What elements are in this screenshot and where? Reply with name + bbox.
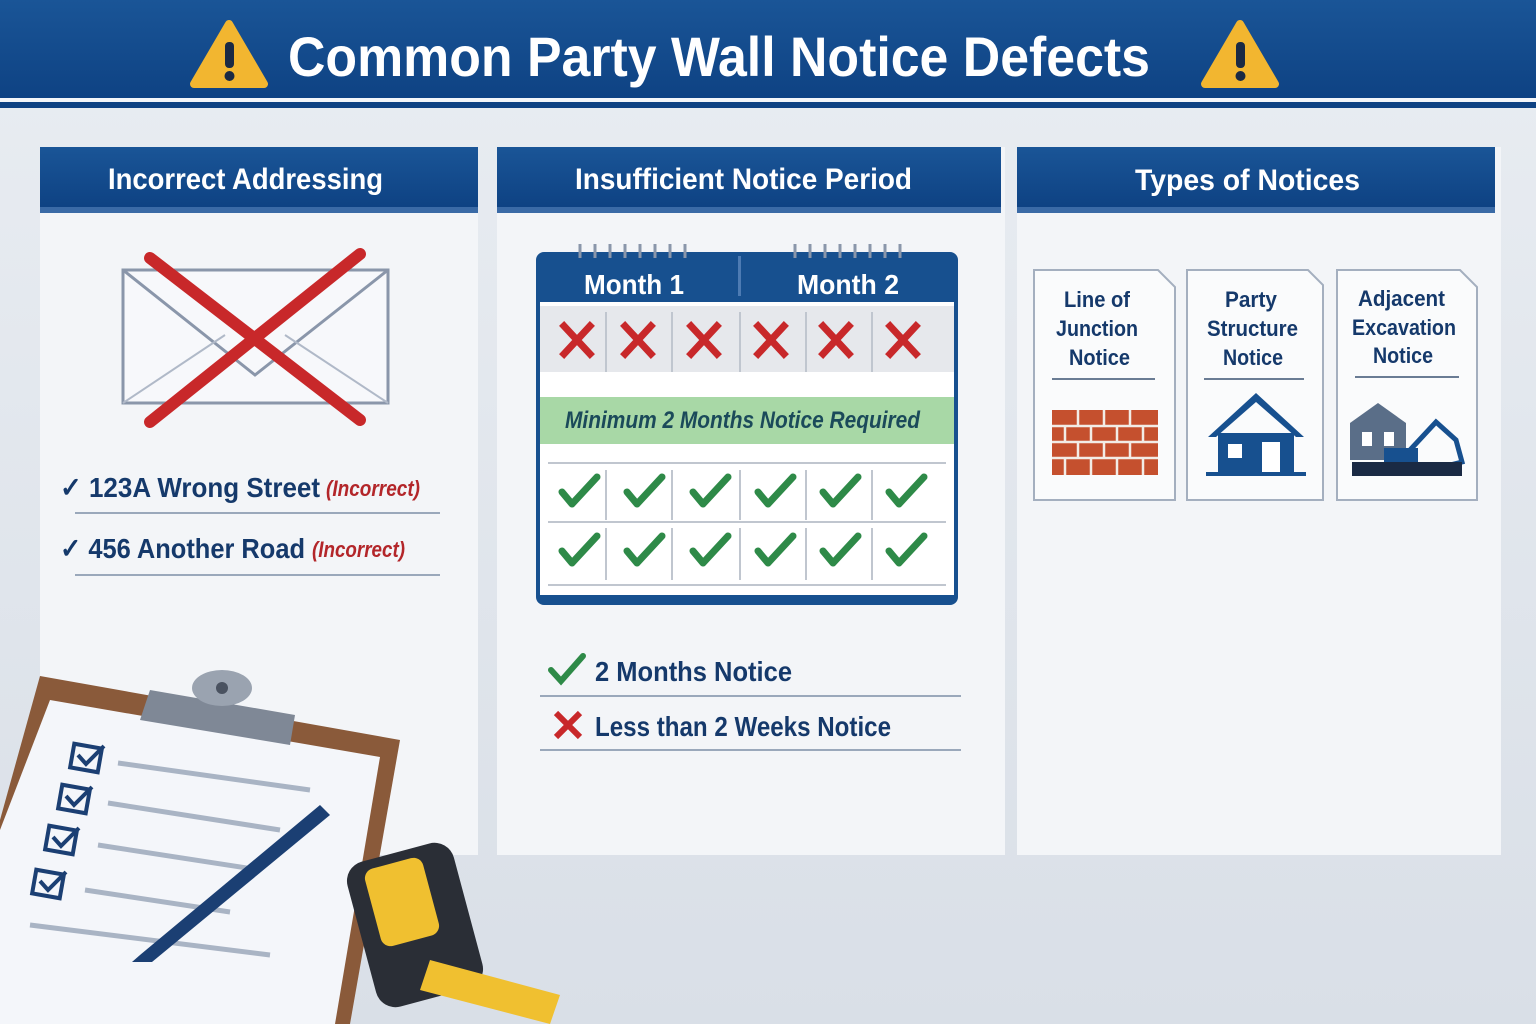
heading: insufficient notice period: Insufficient Notice Period — [575, 163, 912, 196]
card: party structure: Structure — [1207, 316, 1298, 341]
panel: insufficient notice period — [497, 147, 1005, 855]
calendar: Month 2 — [797, 269, 899, 300]
card: line of junction: Notice — [1069, 345, 1130, 370]
clipboard — [0, 670, 560, 1024]
card: line of junction: Line of — [1064, 287, 1131, 312]
address line 1 — [60, 472, 440, 514]
heading: types of notices: Types of Notices — [1135, 164, 1360, 197]
card: line of junction — [1034, 270, 1175, 500]
card: adjacent excavation: Excavation — [1352, 315, 1456, 340]
calendar: Minimum 2 Months Notice Required — [565, 407, 921, 434]
panel: types of notices — [1017, 147, 1501, 855]
address line 1: (Incorrect) — [326, 476, 420, 501]
legend: less than 2 weeks — [540, 711, 961, 751]
panel: incorrect addressing — [40, 147, 478, 855]
legend: 2 months notice — [540, 656, 961, 697]
card: adjacent excavation: Adjacent — [1358, 286, 1446, 311]
title: Common Party Wall Notice Defects — [288, 25, 1150, 88]
card: adjacent excavation: Notice — [1373, 343, 1433, 368]
header banner — [0, 0, 1536, 108]
card: party structure: Notice — [1223, 345, 1283, 370]
card: party structure — [1187, 270, 1323, 500]
icon: warning left — [194, 24, 264, 84]
calendar — [536, 244, 958, 605]
icon: crossed envelope — [123, 254, 388, 422]
legend: 2 months notice: 2 Months Notice — [595, 656, 792, 687]
card: line of junction: Junction — [1056, 316, 1138, 341]
card: party structure: Party — [1225, 287, 1278, 312]
address line 2: ✓ 456 Another Road — [60, 533, 305, 564]
card: adjacent excavation — [1337, 270, 1477, 500]
address line 2: (Incorrect) — [312, 537, 405, 562]
icon: warning right — [1205, 24, 1275, 84]
heading: incorrect addressing: Incorrect Addressing — [108, 163, 383, 196]
legend: less than 2 weeks: Less than 2 Weeks Notice — [595, 711, 891, 742]
calendar: Month 1 — [584, 269, 684, 300]
address line 1: ✓ 123A Wrong Street — [60, 472, 320, 503]
address line 2 — [60, 533, 440, 576]
